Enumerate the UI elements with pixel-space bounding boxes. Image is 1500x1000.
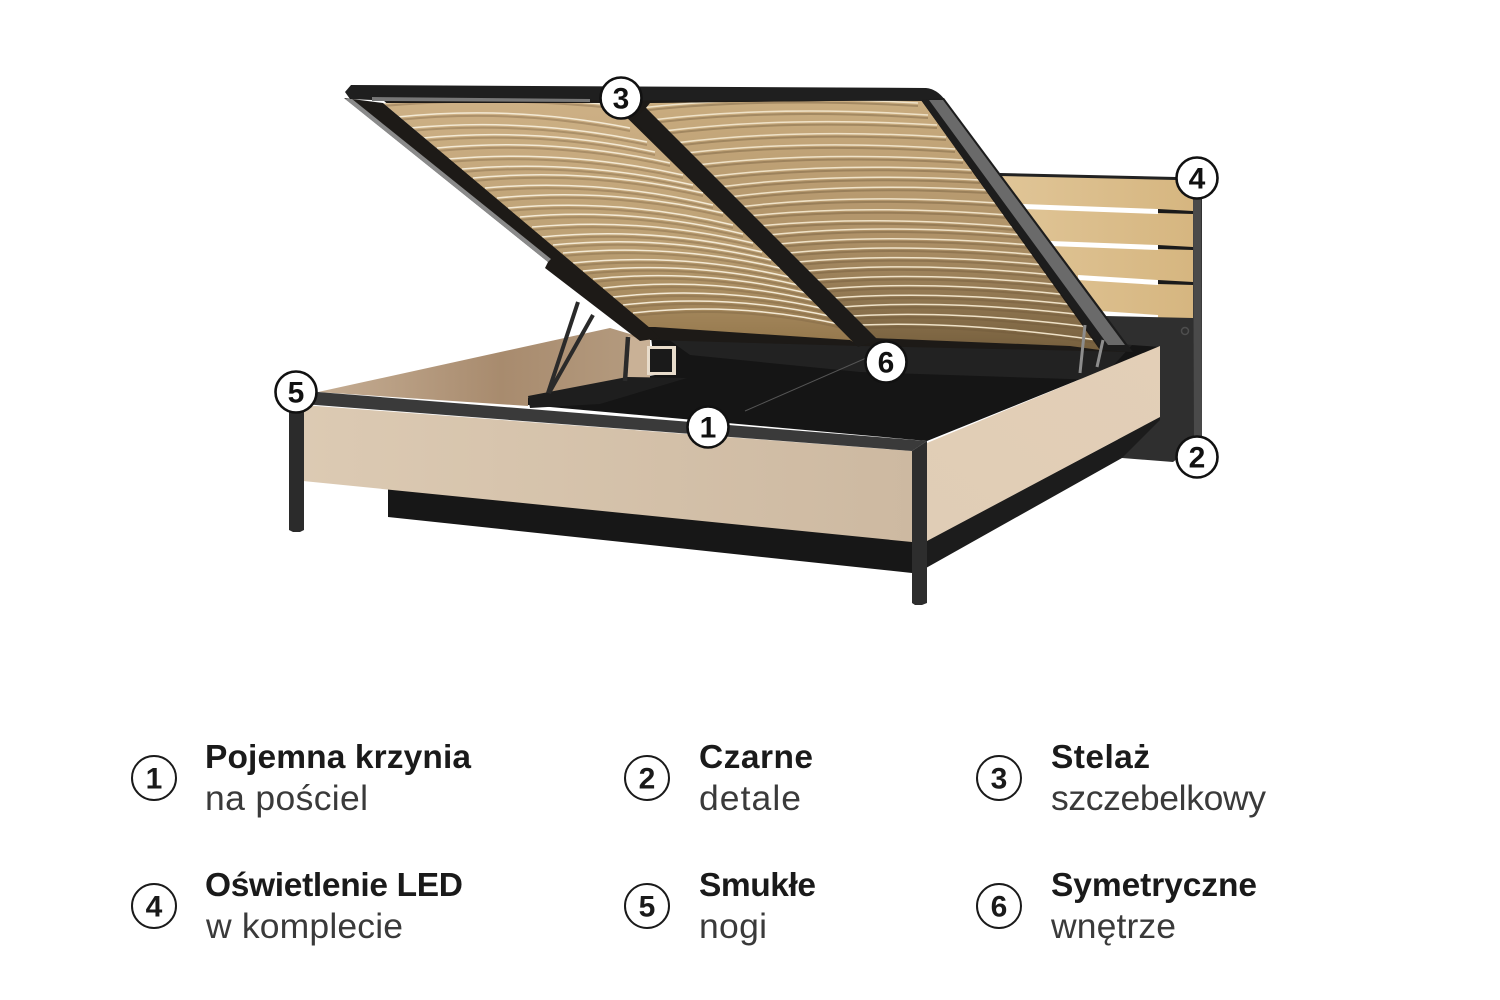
marker 1: [688, 406, 728, 448]
storage cutout: [647, 346, 676, 375]
right leg: [912, 441, 927, 605]
gas struts right: [1080, 325, 1103, 373]
lid backing: [383, 96, 1133, 352]
left rail: [344, 98, 660, 341]
front panel: [303, 405, 912, 542]
base plinth side: [926, 417, 1160, 568]
storage interior: [528, 326, 1160, 441]
legend item 1: na pościel: [205, 778, 368, 818]
marker 2: 2: [1189, 442, 1205, 474]
base plinth: [388, 489, 912, 573]
headboard oak slats: [1000, 173, 1193, 320]
floor strip: [528, 377, 687, 408]
lid slats right: [636, 99, 1100, 350]
marker 3: 3: [613, 82, 629, 116]
marker 5: 5: [288, 376, 304, 410]
legend item 3: szczebelkowy: [1051, 778, 1266, 818]
legend item 4: [132, 867, 463, 946]
legend item 3: [977, 739, 1266, 818]
marker 5: [276, 372, 316, 412]
lid frame: [344, 85, 1133, 352]
left leg: [289, 404, 304, 532]
left inner wall: [318, 328, 650, 406]
legend item 2: [625, 739, 813, 818]
legend item 2: Czarne: [699, 739, 813, 776]
legend item 6: wnętrze: [1050, 906, 1176, 946]
marker 4: 4: [1189, 162, 1206, 196]
legend item 4: w komplecie: [205, 906, 403, 946]
bed illustration: [276, 78, 1218, 605]
legend item 4: Oświetlenie LED: [205, 867, 463, 904]
marker 1: 1: [700, 412, 716, 444]
centre rail: [633, 108, 878, 347]
legend item 3: Stelaż: [1051, 739, 1150, 776]
marker 6: [866, 342, 906, 382]
legend item 6: Symetryczne: [1051, 867, 1257, 904]
legend item 5: [625, 867, 816, 946]
marker 2: [1176, 436, 1218, 478]
legend item 1: [132, 739, 471, 818]
legend item 6: 6: [991, 890, 1007, 924]
legend item 1: 1: [146, 762, 162, 796]
legend item 1: Pojemna krzynia: [205, 739, 471, 776]
legend item 2: detale: [699, 778, 801, 818]
legend item 5: Smukłe: [699, 867, 816, 904]
headboard dark panel: [1100, 190, 1202, 462]
legend item 4: 4: [146, 890, 163, 924]
legend item 6: [977, 867, 1257, 946]
lid slats left: [383, 98, 858, 345]
right rail: [921, 98, 1133, 352]
gas struts left: [548, 302, 628, 393]
legend item 5: 5: [639, 890, 655, 924]
marker 4: [1176, 158, 1218, 198]
lid top bar: [345, 85, 945, 101]
marker 3: [600, 78, 642, 118]
legend item 5: nogi: [699, 906, 767, 946]
side panel: [927, 346, 1160, 541]
headboard: [1000, 173, 1202, 462]
legend: [132, 739, 1266, 946]
marker 6: 6: [878, 346, 894, 380]
legend item 2: 2: [639, 762, 655, 796]
front rim: [303, 392, 927, 451]
legend item 3: 3: [991, 762, 1007, 796]
